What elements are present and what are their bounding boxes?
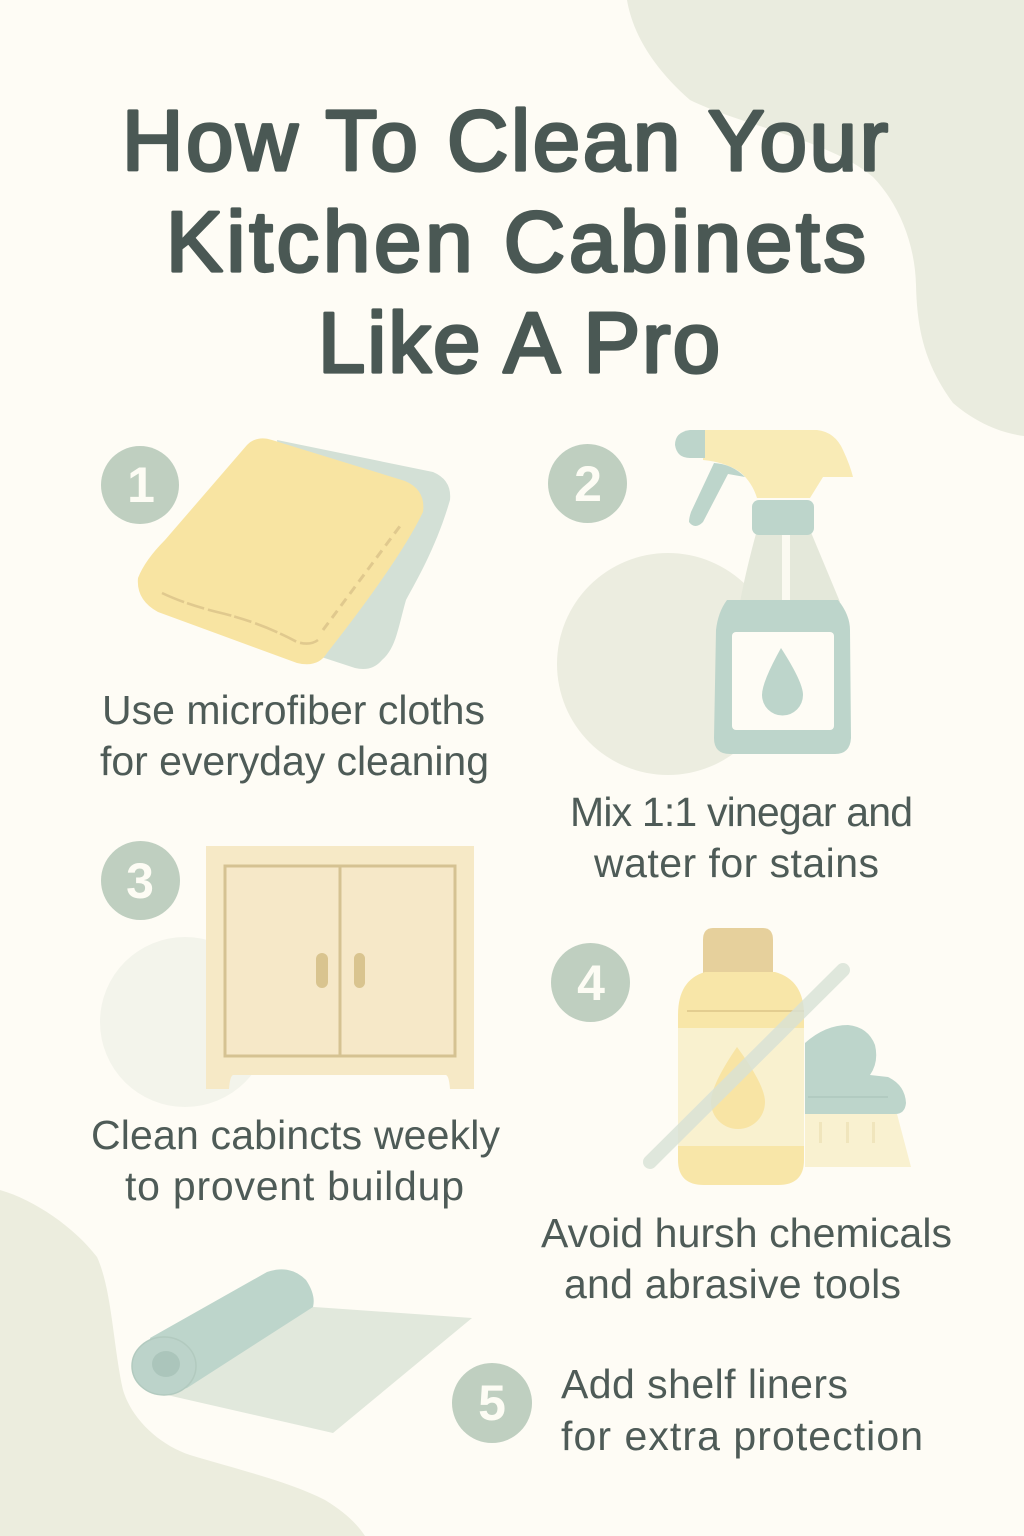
step 4 text: and abrasive tools bbox=[564, 1261, 901, 1307]
prohibition slash bbox=[650, 970, 843, 1162]
step 1 text bbox=[100, 687, 489, 784]
step 3 text: to provent buildup bbox=[125, 1163, 464, 1209]
cabinet body bbox=[206, 846, 474, 1089]
roll core bbox=[152, 1351, 180, 1377]
step 3 text bbox=[91, 1112, 500, 1209]
badge 2 bbox=[548, 444, 627, 523]
bottle neck bbox=[740, 530, 840, 602]
bottle cap bbox=[703, 928, 773, 973]
decorative blob top right bbox=[627, 0, 1024, 436]
title: Like A Pro bbox=[318, 296, 720, 391]
icon: front cloth bbox=[138, 438, 423, 664]
badge 1: 1 bbox=[127, 457, 155, 513]
liner sheet bbox=[167, 1306, 472, 1433]
background circle bbox=[557, 553, 779, 775]
step 2 text bbox=[570, 789, 913, 886]
step 5: shelf liner roll bbox=[132, 1269, 472, 1433]
cabinet doors bbox=[225, 866, 455, 1056]
step 4: chemicals and brush bbox=[650, 928, 911, 1185]
step 2 text: water for stains bbox=[593, 840, 879, 886]
bottle drop bbox=[711, 1047, 765, 1129]
roll body bbox=[150, 1269, 314, 1395]
badge 4: 4 bbox=[577, 955, 605, 1011]
handles bbox=[316, 953, 328, 988]
nozzle bbox=[675, 430, 705, 458]
drop bbox=[762, 648, 803, 716]
cap bbox=[752, 500, 814, 535]
badge 5 bbox=[452, 1363, 532, 1443]
trigger bbox=[689, 463, 745, 526]
roll end bbox=[132, 1337, 196, 1395]
badge 2: 2 bbox=[574, 456, 602, 512]
badge 5: 5 bbox=[478, 1375, 506, 1431]
step 4 text bbox=[541, 1210, 952, 1307]
step 3 text: Clean cabincts weekly bbox=[91, 1112, 500, 1158]
brush mitt bbox=[805, 1025, 906, 1114]
title: How To Clean Your bbox=[122, 94, 888, 189]
title: Kitchen Cabinets bbox=[166, 195, 866, 290]
background circle bbox=[100, 937, 270, 1107]
icon: back cloth bbox=[277, 440, 450, 669]
step 1 text: for everyday cleaning bbox=[100, 738, 489, 784]
brush bristles bbox=[805, 1114, 911, 1167]
sprayer head bbox=[703, 430, 853, 498]
step 3: cabinet bbox=[100, 846, 474, 1107]
title bbox=[122, 94, 888, 391]
step 1: microfiber cloth bbox=[138, 438, 450, 669]
badge 3 bbox=[101, 841, 180, 920]
cloth stitching bbox=[162, 593, 318, 644]
step 2 text: Mix 1:1 vinegar and bbox=[570, 789, 913, 835]
step 5 text: Add shelf liners bbox=[561, 1361, 848, 1407]
step 4 text: Avoid hursh chemicals bbox=[541, 1210, 952, 1256]
decorative blob bottom left bbox=[0, 1190, 365, 1536]
badge 4 bbox=[551, 943, 630, 1022]
bottle body bbox=[714, 600, 851, 754]
step 5 text: for extra protection bbox=[561, 1413, 923, 1459]
badge 1 bbox=[101, 446, 179, 524]
bottle label bbox=[678, 1028, 804, 1146]
badge 3: 3 bbox=[126, 853, 154, 909]
step 5 text bbox=[561, 1361, 923, 1459]
bottle body bbox=[678, 972, 804, 1185]
step 1 text: Use microfiber cloths bbox=[102, 687, 485, 733]
step 2: spray bottle bbox=[557, 430, 853, 775]
label bbox=[732, 632, 834, 730]
